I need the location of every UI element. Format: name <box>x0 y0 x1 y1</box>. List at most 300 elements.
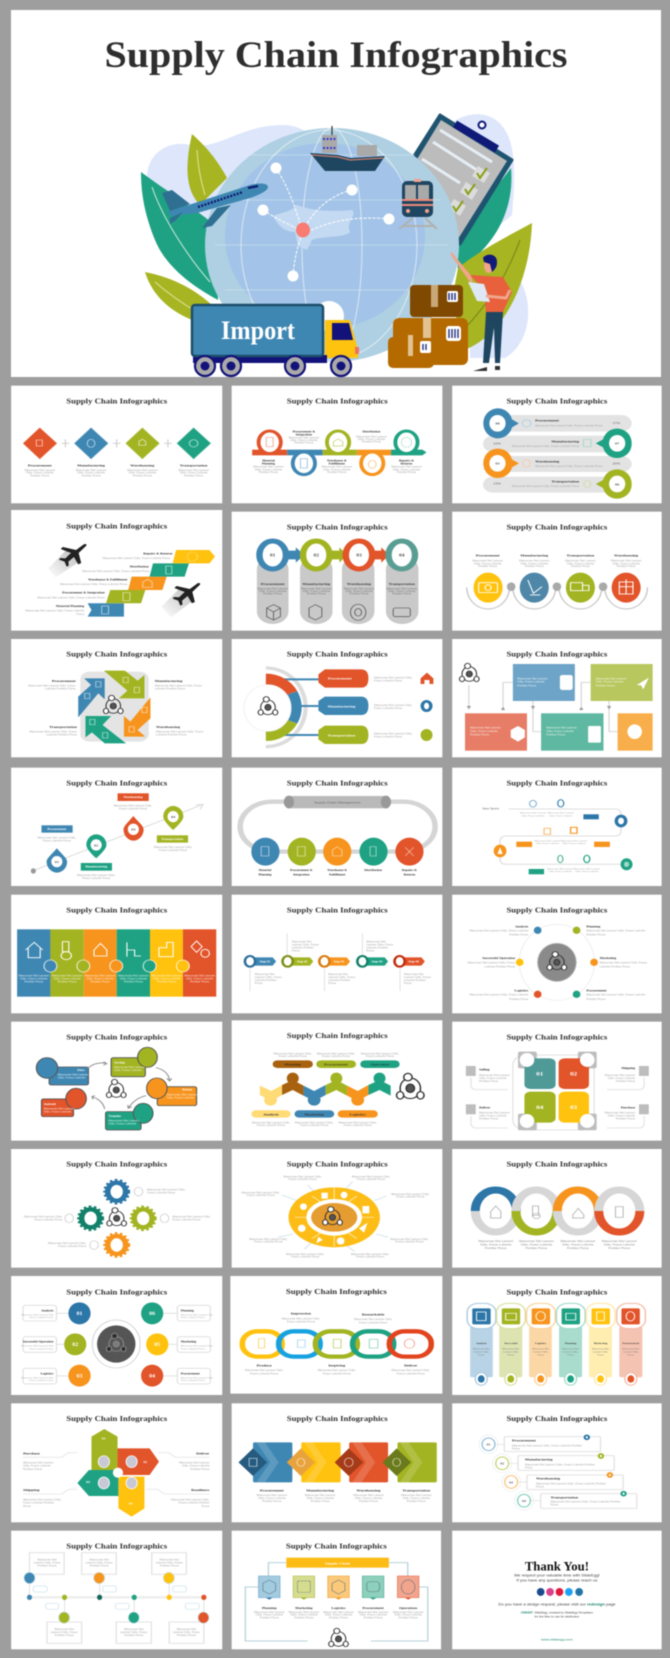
labels: Transportation <box>49 725 78 729</box>
labels: Operations <box>399 1606 418 1610</box>
diamond icons <box>249 1458 400 1467</box>
labels: Maecenas Nisi Laoreet <box>387 587 417 590</box>
labels: Maecenas Nisi Laoreet <box>254 1610 285 1614</box>
box text: Porttitor Purus <box>55 1633 74 1637</box>
connectors <box>469 682 618 732</box>
slide title: Supply Chain Infographics <box>66 649 168 658</box>
card text: Maecenas Nisi <box>502 1348 520 1350</box>
body text: Fusce Lobortis Purus <box>279 1054 308 1058</box>
box labels: Analysis <box>41 1309 54 1312</box>
text: Maecenas Nisi Laoreet Odio, <box>249 1237 288 1241</box>
step text: Maecenas Nisi <box>255 972 275 976</box>
pins: 07 <box>615 442 619 446</box>
text: Odio, Fusce Lobortis <box>521 815 546 817</box>
panel: slide 25 four arrows cross <box>11 1403 222 1522</box>
side lines <box>471 1078 644 1128</box>
text <box>241 1175 430 1259</box>
labels and text: Fulfillment <box>329 462 345 466</box>
card text <box>512 1439 621 1507</box>
labels and text: Distribution <box>363 430 381 434</box>
labels: Maecenas Nisi Laoreet <box>393 1610 424 1614</box>
slide title: Supply Chain Infographics <box>506 397 608 405</box>
diagonal arrow <box>33 804 203 871</box>
labels: Planning <box>258 873 272 876</box>
labels: Deliver <box>404 1364 418 1367</box>
labels: Porttitor Purus <box>525 564 545 568</box>
labels <box>257 582 417 596</box>
frame <box>513 1055 594 1130</box>
header bar: Supply Chain <box>325 1562 351 1565</box>
labels: Transportation <box>551 480 580 483</box>
box labels: Fusce Lobortis Purus <box>181 1316 206 1319</box>
text: credits <box>521 1611 594 1618</box>
step circles <box>245 956 405 967</box>
card tabs <box>266 1598 412 1600</box>
pointer lines <box>278 1182 388 1252</box>
side text: Porttitor Purus <box>616 1079 636 1083</box>
bottom pills: Marketing <box>304 1113 324 1116</box>
slide title: Supply Chain Infographics <box>66 1541 168 1550</box>
numbers: 02 <box>570 1071 577 1077</box>
labels: 10% <box>493 442 501 445</box>
box text: Maecenas Nisi Laoreet <box>546 726 577 730</box>
labels: Maecenas Nisi Laoreet Odio, Fusce <box>600 961 648 965</box>
panel: slide 9 flow boxes <box>452 639 662 757</box>
body text: Maecenas Nisi Laoreet Odio, <box>274 1052 312 1055</box>
box icons <box>511 675 649 743</box>
labels: Porttitor Purus <box>407 1499 427 1503</box>
box labels: Successful Operation <box>23 1340 54 1344</box>
column text: Maecenas Nisi Laoreet <box>118 974 149 977</box>
icon: network <box>106 1079 126 1098</box>
text: Maecenas Nisi Laoreet <box>547 868 574 870</box>
card labels: Button <box>182 1088 193 1092</box>
box text: Maecenas Nisi <box>54 1627 74 1631</box>
panel: slide 23 chain links <box>230 1276 442 1394</box>
labels: Maecenas Nisi Laoreet Odio, Fusce Lobortis <box>25 609 85 613</box>
labels: Fusce Lobortis Purus <box>359 1321 388 1324</box>
card text: Analysis <box>476 1342 487 1345</box>
bottom pills: Logistics <box>350 1113 366 1116</box>
illustration: worker <box>451 253 512 371</box>
text: Maecenas Nisi Laoreet <box>560 1239 595 1243</box>
labels: Odio, Fusce Lobortis <box>259 589 287 593</box>
top pills: Procurement <box>324 1063 349 1067</box>
panel: slide 30 thank you <box>452 1531 662 1649</box>
labels: Procurement <box>260 1489 285 1492</box>
labels: Procurement <box>586 989 608 992</box>
card labels: Odio, Fusce Lobortis <box>109 1122 137 1126</box>
panel: slide 28 horizontal timeline <box>11 1531 222 1649</box>
body text: Maecenas Nisi Laoreet <box>178 468 209 472</box>
step labels: Step 02 <box>297 960 308 964</box>
slide title: Supply Chain Infographics <box>506 778 608 787</box>
panel: slide 15 orbit <box>452 895 662 1013</box>
header bar <box>286 1558 389 1568</box>
cylinder header: Supply Chain Management <box>314 801 360 804</box>
labels: Fusce Lobortis Purus <box>323 1372 352 1375</box>
labels: Purus <box>23 1504 32 1508</box>
labels: Distribution <box>130 565 149 568</box>
step text: Laoreet Odio, Fusce <box>292 943 319 946</box>
card text: Laoreet Odio, <box>623 1351 639 1353</box>
card labels: Android <box>44 1102 56 1106</box>
labels and text <box>253 430 422 474</box>
pins: 01 <box>55 860 59 864</box>
labels <box>28 679 204 737</box>
labels: Maecenas Nisi Laoreet <box>565 559 596 563</box>
panel: slide 19 gears <box>11 1149 222 1268</box>
oval spokes <box>295 1188 374 1247</box>
slide title: Supply Chain Infographics <box>66 397 168 405</box>
labels and text: Material <box>262 459 275 462</box>
labels: 13% <box>493 482 501 486</box>
tag text: Fusce Lobortis Purus <box>82 876 111 880</box>
labels: Porttitor Purus <box>294 1616 314 1619</box>
steps <box>88 550 215 617</box>
pins: 04 <box>171 815 175 819</box>
step labels: Step 05 <box>408 960 420 964</box>
card text: Warehousing <box>536 1477 560 1481</box>
column text: Porttitor Purus <box>58 980 77 983</box>
labels: Lobortis Porttitor Purus <box>600 965 631 969</box>
panel: hero <box>11 10 661 377</box>
circles <box>474 573 641 603</box>
labels: Porttitor Purus <box>586 997 606 1001</box>
tag text: Fusce Lobortis Purus <box>119 807 148 811</box>
labels: Odio, Fusce Lobortis <box>345 589 374 593</box>
labels: Porttitor Purus <box>399 1616 418 1619</box>
tags <box>516 814 610 874</box>
panel: slide 1 process diamonds <box>11 386 222 503</box>
box text: Porttitor Purus <box>37 1564 57 1568</box>
box labels: Maecenas Nisi Laoreet Odio <box>181 1377 214 1379</box>
card text: Maecenas Nisi <box>622 1348 640 1350</box>
text: Fusce Lobortis Purus <box>374 706 403 710</box>
labels: Fusce Lobortis Purus <box>250 1372 279 1375</box>
step icons <box>102 552 197 614</box>
slide title: Supply Chain Infographics <box>66 778 168 787</box>
slide title: Supply Chain Infographics <box>287 1160 388 1168</box>
box labels: Procurement <box>181 1372 200 1375</box>
text: Maecenas Nisi Laoreet Odio, <box>391 1192 430 1196</box>
arrows <box>78 671 150 743</box>
slide title: Supply Chain Infographics <box>506 905 608 914</box>
column text: Porttitor Purus <box>90 980 110 983</box>
diamonds <box>238 1448 411 1476</box>
labels <box>23 1452 210 1508</box>
card text: Maecenas Nisi <box>473 1348 490 1350</box>
labels: Procurement & <box>290 868 313 872</box>
ribbon <box>252 450 427 455</box>
labels: Odio, Fusce Lobortis <box>388 589 416 593</box>
labels: Lobortis Porttitor Purus <box>45 687 76 691</box>
column text: Maecenas Nisi Laoreet <box>184 974 215 977</box>
text: website: www.slideegg.com <box>541 1638 573 1641</box>
labels: Porttitor Purus <box>307 592 327 596</box>
card text: Transportation <box>550 1496 579 1499</box>
step text: Purus <box>366 949 375 952</box>
labels: Fusce Lobortis Purus <box>287 1320 316 1324</box>
center blob <box>538 943 576 981</box>
labels: Transportation <box>180 464 208 467</box>
step text: Purus <box>292 949 300 952</box>
body text: Porttitor Purus <box>82 474 101 477</box>
numbers: 04 <box>86 1480 90 1484</box>
arrows <box>286 547 389 563</box>
box text: Odio, Fusce Lobortis <box>470 729 498 733</box>
labels: Maecenas Nisi Laoreet Odio, Fusce Lobortis <box>469 993 529 997</box>
labels: Deliver <box>196 1452 210 1455</box>
circles <box>36 1047 167 1123</box>
text: Odio, Fusce Lobortis <box>521 1243 553 1246</box>
slide title: Supply Chain Infographics <box>506 1414 608 1423</box>
labels: Porttitor Purus <box>349 592 369 596</box>
vertical connectors <box>29 1583 204 1612</box>
labels: Distribution <box>364 868 382 872</box>
labels: Odio, Fusce Lobortis <box>256 1613 284 1617</box>
labels: Maecenas Nisi Laoreet Odio, <box>354 1317 393 1321</box>
card labels: Odio, Fusce Lobortis <box>58 1076 86 1080</box>
labels: Porttitor Purus <box>478 564 498 568</box>
hub <box>92 1320 140 1368</box>
box labels: Fusce Lobortis Purus <box>29 1348 54 1350</box>
diamond icons <box>36 439 198 447</box>
labels: Transportation <box>389 582 415 586</box>
pins <box>483 408 632 499</box>
labels <box>493 419 620 488</box>
card labels: Maecenas Nisi Laoreet <box>44 1107 74 1110</box>
box text: Odio, Fusce Lobortis <box>596 680 624 684</box>
outer rounds <box>467 1303 645 1329</box>
labels and text: Maecenas Nisi Laoreet <box>322 465 352 469</box>
numbers: 03 <box>356 554 362 558</box>
connectors <box>282 679 318 735</box>
box labels: Planning <box>181 1309 194 1312</box>
tag text: Maecenas Nisi Laoreet Odio, <box>77 873 116 877</box>
labels: Odio, Fusce Lobortis <box>612 562 641 565</box>
box text: Porttitor Purus <box>596 684 616 687</box>
icon: airplanes <box>48 544 200 617</box>
nodes: 05 <box>154 1343 161 1348</box>
text: Maecenas Nisi Laoreet <box>478 1239 513 1243</box>
step text: Maecenas Nisi <box>404 972 424 976</box>
labels: Odio, Fusce Lobortis <box>23 1464 51 1468</box>
connector lines <box>245 1563 428 1641</box>
card text <box>473 1342 640 1356</box>
labels: Lobortis Porttitor Purus <box>46 733 78 737</box>
card text: Maecenas Nisi <box>562 1348 579 1350</box>
pill icons <box>522 420 591 488</box>
pins <box>24 1572 209 1623</box>
labels and text: Porttitor Purus <box>327 470 347 474</box>
slide title: Supply Chain Infographics <box>506 1287 608 1296</box>
illustration: truck <box>192 301 359 376</box>
labels: Warehousing <box>535 460 559 463</box>
chain links <box>242 1331 431 1357</box>
panel: slide 3 pills with pins <box>452 386 662 503</box>
labels: Maecenas Nisi Laoreet Odio, Fusce <box>28 684 76 688</box>
tags: Manufacturing <box>85 865 108 869</box>
inner oval <box>306 1199 362 1236</box>
numbers: 02 <box>143 1460 148 1464</box>
pins: 03 <box>131 828 136 832</box>
text <box>520 812 600 873</box>
numbers <box>487 1443 526 1503</box>
side text: Porttitor Purus <box>616 1117 636 1120</box>
panel: slide 4 staircase <box>11 510 222 631</box>
labels: Logistics <box>331 1606 346 1610</box>
boxes <box>465 664 653 751</box>
cylinder header <box>284 796 391 808</box>
labels: Porttitor Purus <box>23 1467 43 1471</box>
body text: Maecenas Nisi Laoreet Odio, <box>339 1121 377 1124</box>
square icons <box>477 1312 635 1321</box>
step labels: Step 03 <box>334 960 345 964</box>
gray square <box>80 672 149 742</box>
labels: Maecenas Nisi Laoreet Odio, Fusce Lobortis Purus <box>512 444 580 448</box>
text: Fusce Lobortis Purus <box>395 1240 424 1244</box>
hub <box>244 685 291 731</box>
box text: Odio, Fusce Lobortis <box>546 729 574 733</box>
body text: Maecenas Nisi Laoreet Odio, <box>252 1121 290 1124</box>
tags: Warehousing <box>123 795 143 799</box>
numbers <box>270 554 405 558</box>
labels: Produce <box>257 1364 272 1367</box>
column text: Odio, Fusce Lobortis <box>20 977 48 980</box>
pale cards <box>470 1327 642 1377</box>
slide title: Supply Chain Infographics <box>287 523 388 531</box>
columns <box>17 929 216 997</box>
labels: Manufacturing <box>302 582 330 586</box>
labels: Odio, Fusce Lobortis <box>182 1464 210 1468</box>
labels: Remarkable <box>362 1313 385 1316</box>
labels: Odio, Fusce Lobortis <box>359 1613 388 1617</box>
step text: Lobortis Porttitor <box>328 978 350 982</box>
panel: slide 7 cycle arrows <box>11 639 222 757</box>
step text: Laoreet Odio, Fusce <box>328 975 356 979</box>
card labels: Odio, Fusce Lobortis <box>114 1068 142 1072</box>
body text: Odio, Fusce Lobortis <box>77 471 106 475</box>
card labels: Maecenas Nisi Laoreet <box>114 1065 145 1069</box>
labels: Warehousing <box>347 582 371 586</box>
arcs <box>467 587 648 609</box>
labels: Maecenas Nisi Laoreet Odio, <box>23 1498 62 1501</box>
panel: slide 26 chevron blocks <box>232 1403 442 1522</box>
circle icons <box>261 847 414 856</box>
box text: Porttitor Purus <box>160 1564 180 1568</box>
box text: Laoreet Odio, Fusce <box>120 1630 148 1634</box>
card text: Maecenas Nisi Laoreet Odio, Fusce Lobortis Porttitor <box>512 1444 582 1447</box>
side text: Maecenas Nisi Laoreet <box>605 1111 635 1114</box>
labels: Odio, Fusce Lobortis <box>306 1496 335 1500</box>
slide title: Supply Chain Infographics <box>66 905 168 914</box>
side text: Porttitor Purus <box>479 1079 499 1083</box>
slide title: Supply Chain Infographics <box>66 1287 168 1296</box>
text: Maecenas Nisi Laoreet Odio, <box>241 1191 280 1194</box>
labels and text: Porttitor Purus <box>362 440 382 444</box>
orbit <box>519 924 595 1000</box>
loop track <box>240 802 435 852</box>
side text: Odio, Fusce Lobortis <box>608 1076 636 1080</box>
pills <box>318 669 368 744</box>
box labels: Maecenas Nisi Laoreet Odio <box>21 1345 54 1348</box>
step text: Purus <box>404 981 412 985</box>
labels: Porttitor Purus <box>571 564 591 568</box>
icon: network <box>258 697 278 715</box>
box labels: Logistics <box>41 1372 54 1375</box>
curved arrows <box>88 1062 172 1109</box>
labels: Maecenas Nisi Laoreet Odio, <box>171 1498 210 1501</box>
labels: Odio, Fusce Lobortis <box>394 1613 423 1617</box>
slide title: Supply Chain Infographics <box>506 649 608 658</box>
labels and text: Odio, Fusce Lobortis <box>393 468 421 471</box>
numbers: 04 <box>399 554 405 558</box>
card text: Laoreet Odio, <box>474 1351 489 1353</box>
illustration: right leaf <box>452 223 532 350</box>
step tags <box>252 957 425 966</box>
text: If you have any questions, please reach us <box>516 1579 597 1582</box>
column text: Porttitor Purus <box>157 980 177 983</box>
labels: Maecenas Nisi Laoreet Odio, Fusce Lobortis <box>586 993 646 997</box>
labels: Porttitor Purus <box>364 1616 383 1619</box>
labels: Maecenas Nisi Laoreet <box>519 559 550 563</box>
outer rings <box>479 1435 533 1510</box>
card text: Successful <box>504 1342 518 1345</box>
column text <box>19 974 215 983</box>
labels: 17% <box>612 421 620 425</box>
nodes: 02 <box>72 1343 79 1348</box>
labels: Porttitor Purus <box>311 1499 330 1503</box>
illustration: background blobs <box>147 114 528 358</box>
panel: slide 27 stepped cards <box>452 1403 662 1522</box>
numbers <box>536 1071 578 1111</box>
labels: Maecenas Nisi Laoreet Odio, Fusce Lobortis Purus <box>535 464 603 468</box>
icon: network <box>397 1073 424 1099</box>
labels: Porttitor Purus <box>509 997 529 1001</box>
side text: Purchase <box>621 1106 636 1109</box>
text: request: Do you have a design request, please visit our redesign page <box>498 1603 616 1607</box>
box text: Porttitor Purus <box>177 1633 197 1637</box>
card text: Maecenas Nisi <box>532 1348 550 1350</box>
text <box>24 1188 211 1248</box>
body text: Maecenas Nisi Laoreet Odio, <box>361 1052 399 1055</box>
labels: Maecenas Nisi Laoreet <box>401 1493 432 1497</box>
circles <box>251 838 424 866</box>
box text: Laoreet Odio, Fusce <box>173 1630 200 1634</box>
oval <box>288 1187 380 1247</box>
icon: network <box>103 695 123 714</box>
gears <box>79 1180 155 1257</box>
text: Maecenas Nisi Laoreet Odio, <box>374 703 413 707</box>
labels: Lobortis Porttitor Purus <box>156 733 187 737</box>
labels: Maecenas Nisi Laoreet Odio, Fusce Lobortis Purus <box>37 596 105 599</box>
text: Fusce Lobortis Purus <box>356 1255 385 1259</box>
circle icons <box>479 579 633 595</box>
timeline bar <box>29 1593 205 1601</box>
card icons <box>263 1580 415 1594</box>
body text: Fusce Lobortis Purus <box>300 1123 329 1127</box>
text: Fusce Lobortis Purus <box>374 679 403 682</box>
panel: slide 20 yellow oval <box>232 1149 442 1268</box>
labels: Transportation <box>567 554 595 558</box>
card labels: Transfer <box>109 1114 122 1118</box>
labels: Procurement <box>476 554 500 558</box>
labels and text: Odio, Fusce Lobortis <box>255 468 283 471</box>
labels: Procurement <box>261 582 285 586</box>
column text: Odio, Fusce Lobortis <box>86 977 114 980</box>
text: Maecenas Nisi Laoreet <box>519 1239 554 1243</box>
